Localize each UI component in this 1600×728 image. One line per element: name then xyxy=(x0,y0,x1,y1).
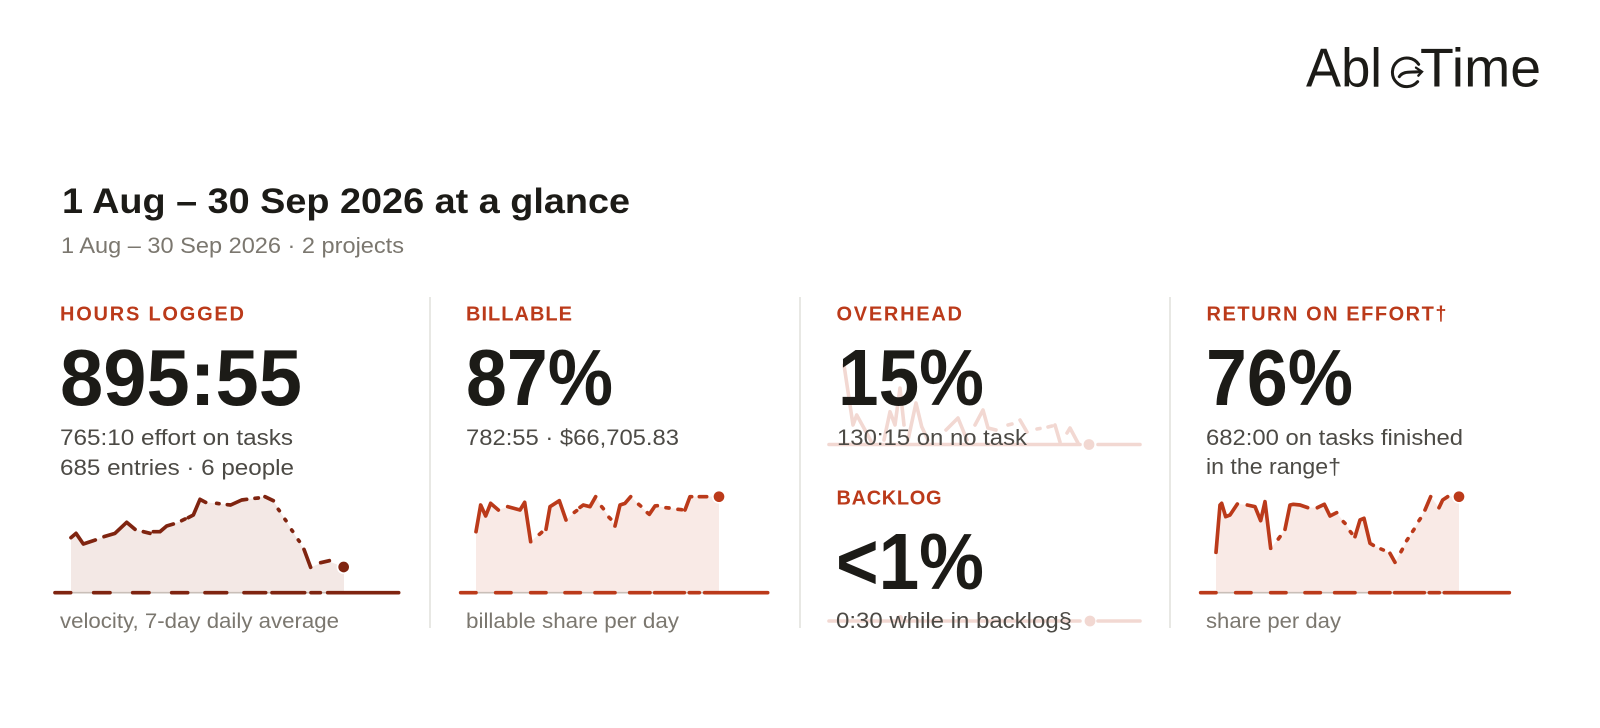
big number: 15%: 15% xyxy=(838,333,984,422)
text: no task hours: 130:15 on no task xyxy=(837,425,1028,450)
panel: backlog xyxy=(829,488,1140,633)
caption: share per day xyxy=(1206,610,1342,633)
caption: velocity, 7-day daily average xyxy=(60,610,339,633)
heading: return on effort: RETURN ON EFFORT† xyxy=(1206,304,1446,326)
text: effort and entries: 765:10 effort on tasks xyxy=(60,425,293,450)
subtitle: 1 Aug – 30 Sep 2026 · 2 projects xyxy=(61,233,404,258)
big number: 895:55: 895:55 xyxy=(60,333,302,422)
heading: hours logged: HOURS LOGGED xyxy=(60,304,244,326)
chart: share per day sparkline xyxy=(1200,490,1510,593)
panel: overhead xyxy=(829,304,1140,450)
big number: 87%: 87% xyxy=(466,333,613,422)
caption: billable share per day xyxy=(466,610,680,633)
panel: billable xyxy=(460,304,768,633)
text: effort and entries: 685 entries · 6 people xyxy=(60,455,294,480)
divider lines xyxy=(430,297,1170,628)
heading: billable: BILLABLE xyxy=(466,304,572,326)
heading: backlog: BACKLOG xyxy=(836,488,942,510)
big number: less than 1%: <1% xyxy=(836,517,984,606)
logo: AbleTime xyxy=(1306,37,1541,99)
title: 1 Aug – 30 Sep 2026 at a glance xyxy=(62,182,630,221)
chart: velocity sparkline xyxy=(53,497,400,593)
logo: AbleTime: Time xyxy=(1420,37,1541,99)
icon: clock arrow letter e xyxy=(1392,58,1422,87)
chart: backlog sparkline (pale, behind text) xyxy=(829,615,1140,626)
chart: overhead sparkline (pale, behind text) xyxy=(829,365,1140,450)
text: effort and entries xyxy=(60,425,294,480)
panel: hours logged xyxy=(53,304,400,633)
chart: billable share sparkline xyxy=(460,490,768,593)
text: tasks finished: 682:00 on tasks finished xyxy=(1206,425,1463,450)
text: tasks finished xyxy=(1206,425,1463,479)
text: billable hours and amount: 782:55 · $66,705.83 xyxy=(466,425,679,450)
big number: 76%: 76% xyxy=(1206,333,1353,422)
text: backlog hours: 0:30 while in backlog§ xyxy=(836,608,1072,633)
text: tasks finished: in the range† xyxy=(1206,454,1341,479)
panel: return on effort xyxy=(1200,304,1510,633)
logo: AbleTime: Abl xyxy=(1306,37,1382,99)
heading: overhead: OVERHEAD xyxy=(836,304,962,326)
